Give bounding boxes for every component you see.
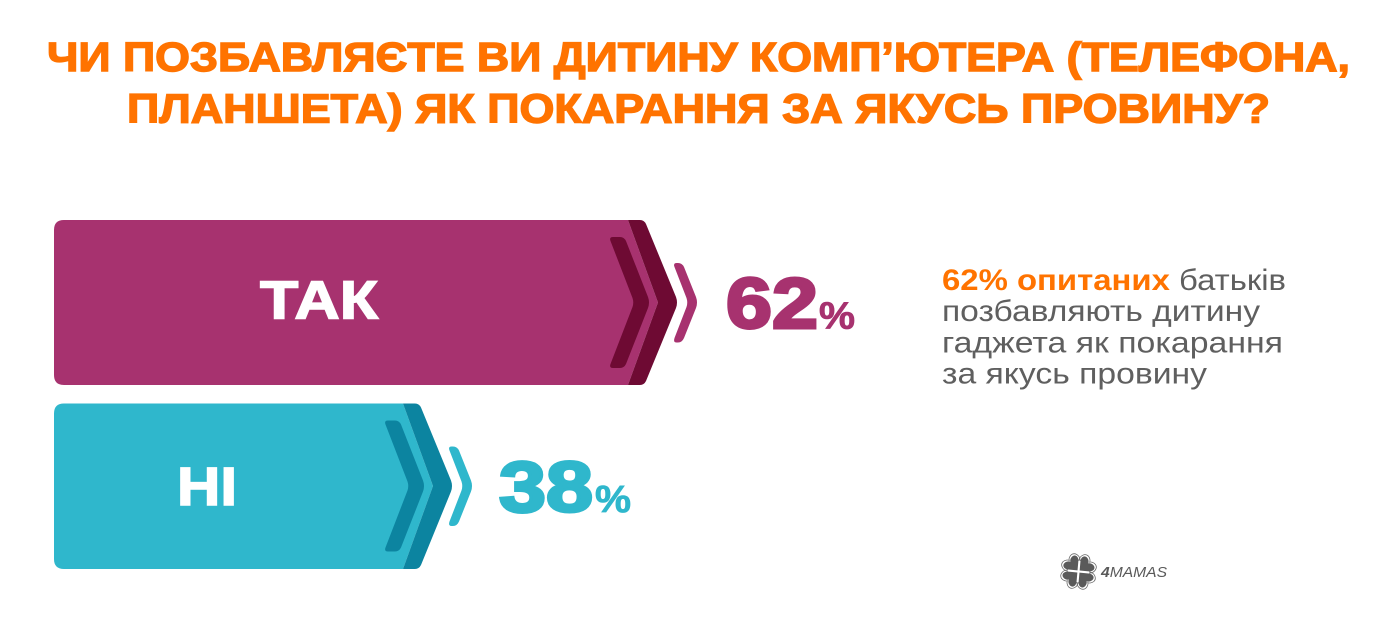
inner chevron: ні [385,420,424,552]
explanatory text: позбавляють дитину [942,295,1260,328]
chevron band: так [628,220,677,385]
value: 62%: 62 [726,265,818,344]
logo: 4mamas [1057,550,1167,593]
value: 38%: 38 [499,448,593,528]
outer chevron: так [674,263,697,342]
inner chevron: так [610,237,649,368]
outer chevron: ні [449,446,472,526]
explanatory text [942,264,1286,390]
label: ні: НІ [177,457,237,517]
title: ЧИ ПОЗБАВЛЯЄТЕ ВИ ДИТИНУ КОМП’ЮТЕРА (ТЕЛЕФОНА, [47,34,1350,80]
value: 38%: % [595,479,631,521]
explanatory text: за якусь провину [942,358,1207,390]
value: 62% [726,265,855,344]
logo wordmark: 4MAMAS [1100,565,1167,581]
icon: clover [1057,550,1100,593]
explanatory text: гаджета як покарання [942,326,1283,360]
bar: ні 38% [54,404,631,569]
value: 38% [499,448,631,528]
bar: так 62% [54,220,855,385]
value: 62%: % [819,296,855,338]
chevron band: ні [403,404,452,569]
bar body: ні [54,404,433,569]
label: так: ТАК [260,270,379,330]
explanatory text: 62% опитаних батьків [942,264,1286,297]
title [47,34,1350,132]
bar body: так [54,220,658,385]
title: ПЛАНШЕТА) ЯК ПОКАРАННЯ ЗА ЯКУСЬ ПРОВИНУ? [127,86,1270,132]
